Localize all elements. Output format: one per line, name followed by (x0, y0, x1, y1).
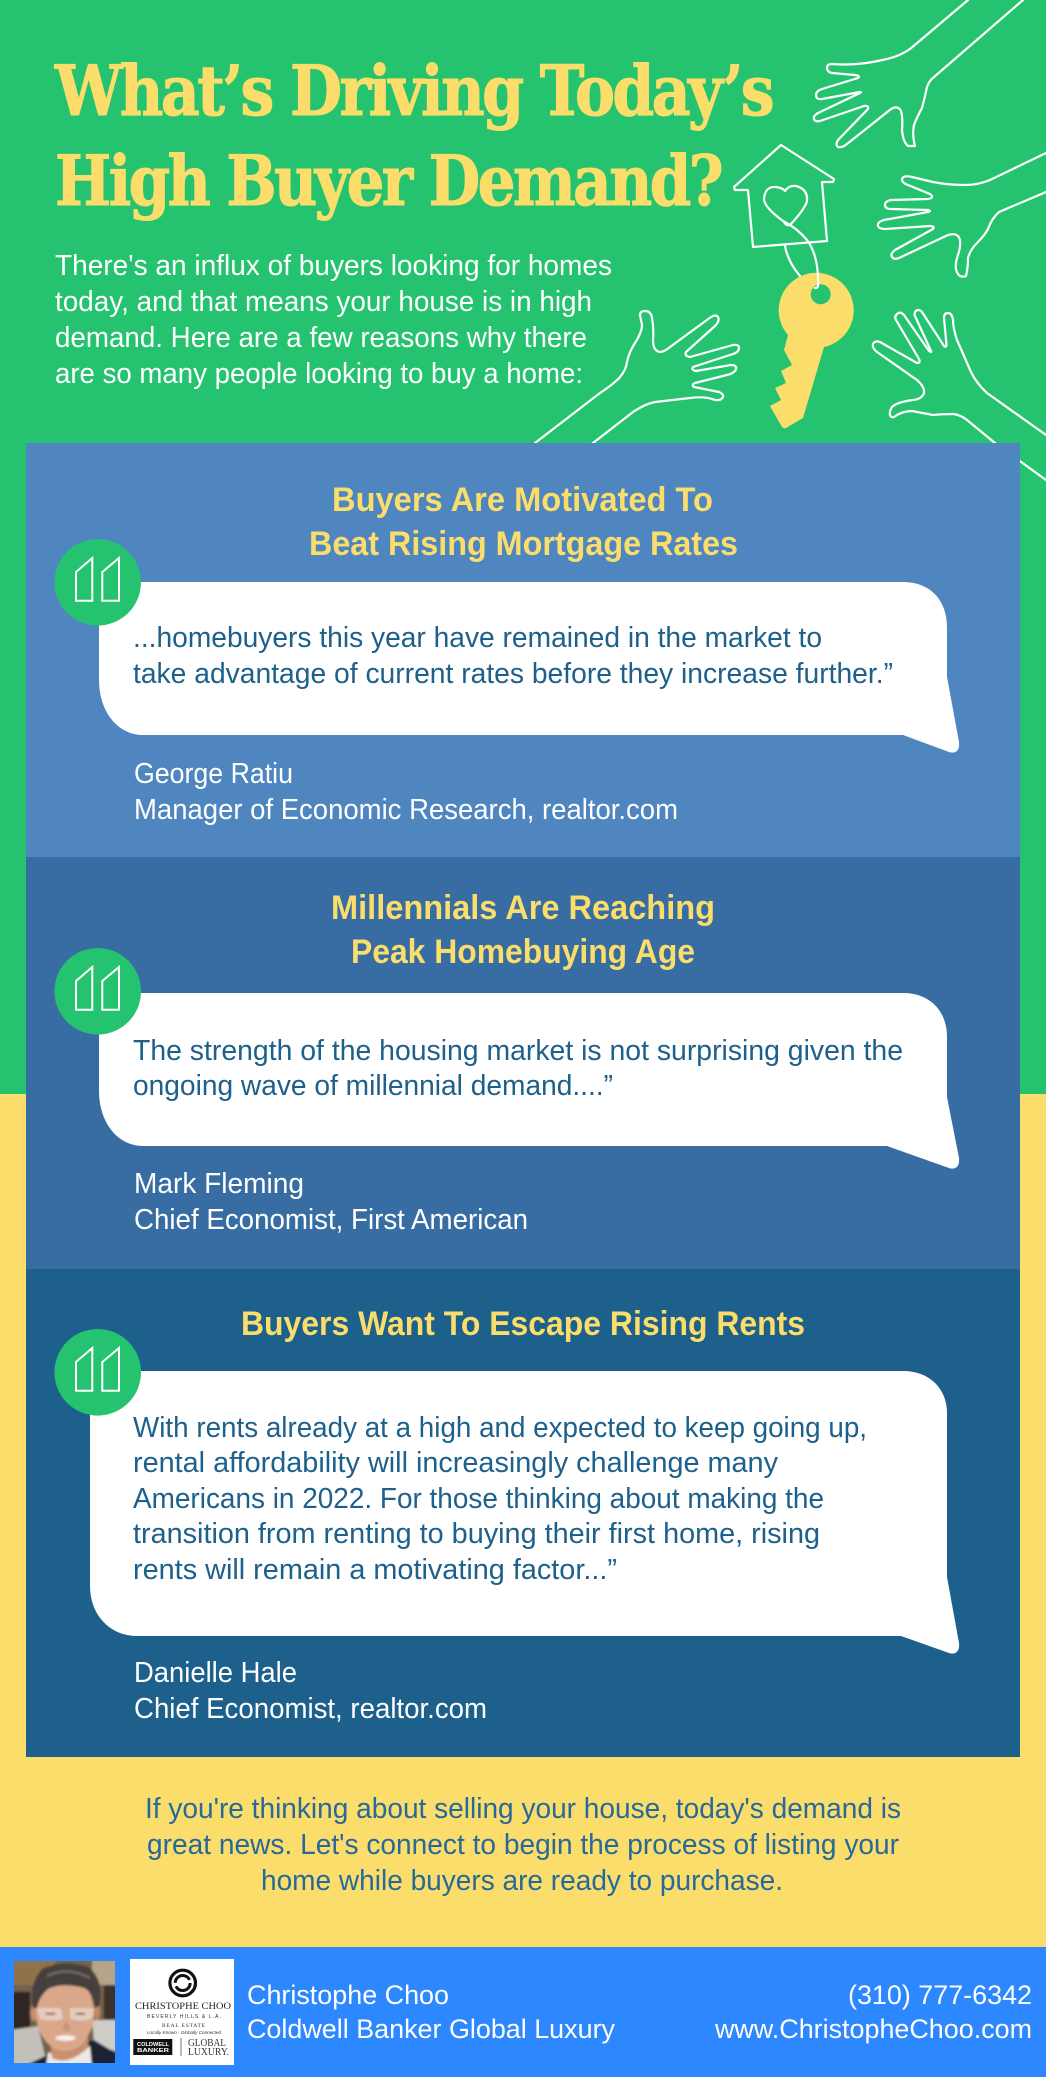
quote text: rental affordability will increasingly challenge many (133, 1447, 778, 1479)
logo: LUXURY. (188, 2047, 229, 2058)
speech bubble (99, 582, 959, 753)
quote text: With rents already at a high and expected to keep going up, (133, 1412, 867, 1444)
icon: hand lower left (535, 311, 739, 443)
intro text (55, 250, 612, 390)
quote text (133, 622, 893, 690)
logo: Locally Known · Globally Connected (147, 2030, 222, 2035)
quote text: take advantage of current rates before they increase further.” (133, 658, 893, 690)
attribution (134, 1168, 528, 1236)
quote text: rents will remain a motivating factor...” (133, 1554, 617, 1586)
attribution (134, 758, 678, 826)
icon: house key with heart keychain (734, 145, 854, 428)
attribution: Manager of Economic Research, realtor.com (134, 794, 678, 826)
icon: quote mark (54, 1329, 141, 1416)
closing text: home while buyers are ready to purchase. (261, 1865, 783, 1897)
title (54, 51, 773, 222)
closing text (145, 1793, 901, 1897)
heading: Buyers Want To Escape Rising Rents (241, 1305, 805, 1343)
logo: CHRISTOPHE CHOO (135, 2002, 231, 2012)
attribution: George Ratiu (134, 758, 293, 790)
heading: Millennials Are Reaching (331, 889, 715, 927)
icon: hand lower right (873, 310, 1046, 480)
intro text: There's an influx of buyers looking for homes (55, 250, 612, 282)
logo: BEVERLY HILLS & L.A. (147, 2014, 221, 2020)
quote text: ongoing wave of millennial demand....” (133, 1070, 613, 1102)
quote text (133, 1412, 867, 1586)
agent name: Christophe Choo (247, 1980, 449, 2010)
icon: hand top right (814, 0, 1023, 147)
contact details: (310) 777-6342 (848, 1980, 1032, 2010)
quote text: ...homebuyers this year have remained in the market to (133, 622, 822, 654)
panel: rising rents (26, 1269, 1020, 1757)
speech bubble (99, 993, 959, 1169)
logo: COLDWELL (137, 2042, 170, 2048)
intro text: are so many people looking to buy a home: (55, 358, 583, 390)
contact details (714, 1980, 1032, 2044)
contact details: www.ChristopheChoo.com (714, 2014, 1032, 2044)
icon: hand right (878, 153, 1046, 277)
logo: BANKER (137, 2048, 169, 2054)
logo (130, 1959, 234, 2065)
heading (331, 889, 715, 971)
attribution: Danielle Hale (134, 1657, 297, 1689)
panel: buyers motivated by mortgage rates (26, 443, 1020, 857)
closing text: If you're thinking about selling your house, today's demand is (145, 1793, 901, 1825)
panel: millennials (26, 857, 1020, 1269)
quote text (133, 1035, 903, 1102)
quote text: The strength of the housing market is not surprising given the (133, 1035, 903, 1067)
agent name (247, 1980, 615, 2044)
heading (309, 481, 738, 563)
title: What’s Driving Today’s (54, 51, 773, 132)
attribution: Mark Fleming (134, 1168, 304, 1200)
agent name: Coldwell Banker Global Luxury (247, 2014, 615, 2044)
icon: quote mark (54, 948, 141, 1035)
heading: Peak Homebuying Age (351, 933, 695, 971)
attribution (134, 1657, 487, 1725)
speech bubble (90, 1371, 959, 1654)
closing text: great news. Let's connect to begin the process of listing your (147, 1829, 899, 1861)
attribution: Chief Economist, realtor.com (134, 1693, 487, 1725)
quote text: transition from renting to buying their first home, rising (133, 1518, 820, 1550)
attribution: Chief Economist, First American (134, 1204, 528, 1236)
heading: Beat Rising Mortgage Rates (309, 525, 738, 563)
agent photo (14, 1961, 115, 2063)
quote text: Americans in 2022. For those thinking about making the (133, 1483, 824, 1515)
intro text: demand. Here are a few reasons why there (55, 322, 587, 354)
title: High Buyer Demand? (55, 141, 721, 222)
icon: quote mark (54, 539, 141, 626)
logo: REAL ESTATE (162, 2023, 206, 2029)
intro text: today, and that means your house is in high (55, 286, 592, 318)
logo: GLOBAL (188, 2038, 226, 2049)
footer bar (0, 1947, 1046, 2077)
heading: Buyers Are Motivated To (332, 481, 713, 519)
